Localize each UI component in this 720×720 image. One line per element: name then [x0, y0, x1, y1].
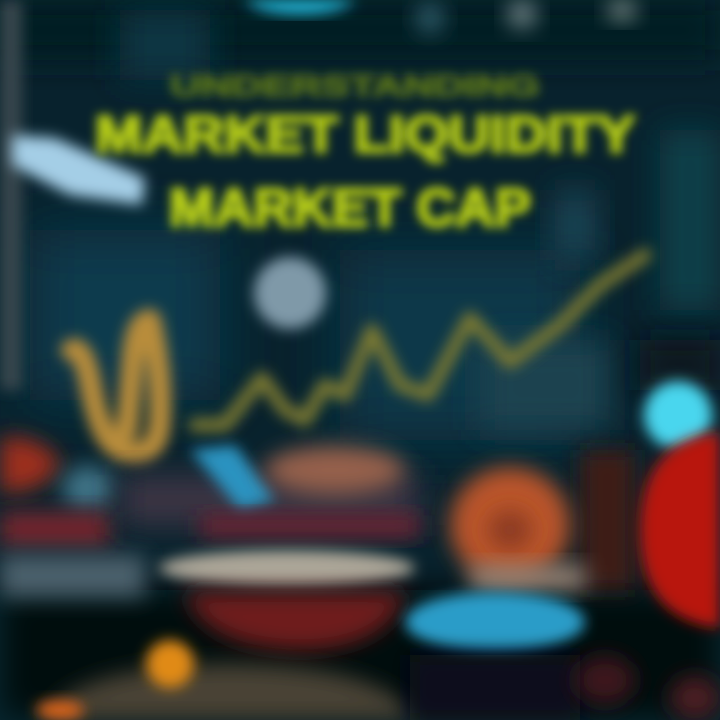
- stacked coins left: [0, 437, 420, 597]
- dark red details lower right: [575, 656, 720, 720]
- title: UNDERSTANDING: [170, 70, 540, 103]
- orange coin with dark side: [450, 450, 635, 590]
- blue shard and peach shape in the middle: [190, 445, 405, 510]
- title: MARKET CAP: [169, 178, 531, 238]
- title: [95, 70, 635, 238]
- blue bowl lower right: [405, 592, 585, 720]
- central bowl: [159, 515, 420, 650]
- light blue swoosh on the left: [12, 135, 145, 205]
- red sphere on the right: [640, 432, 720, 628]
- top light elements: [244, 0, 636, 34]
- title: MARKET LIQUIDITY: [95, 106, 635, 164]
- pale moon circle: [254, 257, 326, 329]
- bottom planet with orange glows: [36, 640, 415, 720]
- line chart: golden price line: [72, 255, 645, 453]
- cyan glow orb: [644, 381, 712, 449]
